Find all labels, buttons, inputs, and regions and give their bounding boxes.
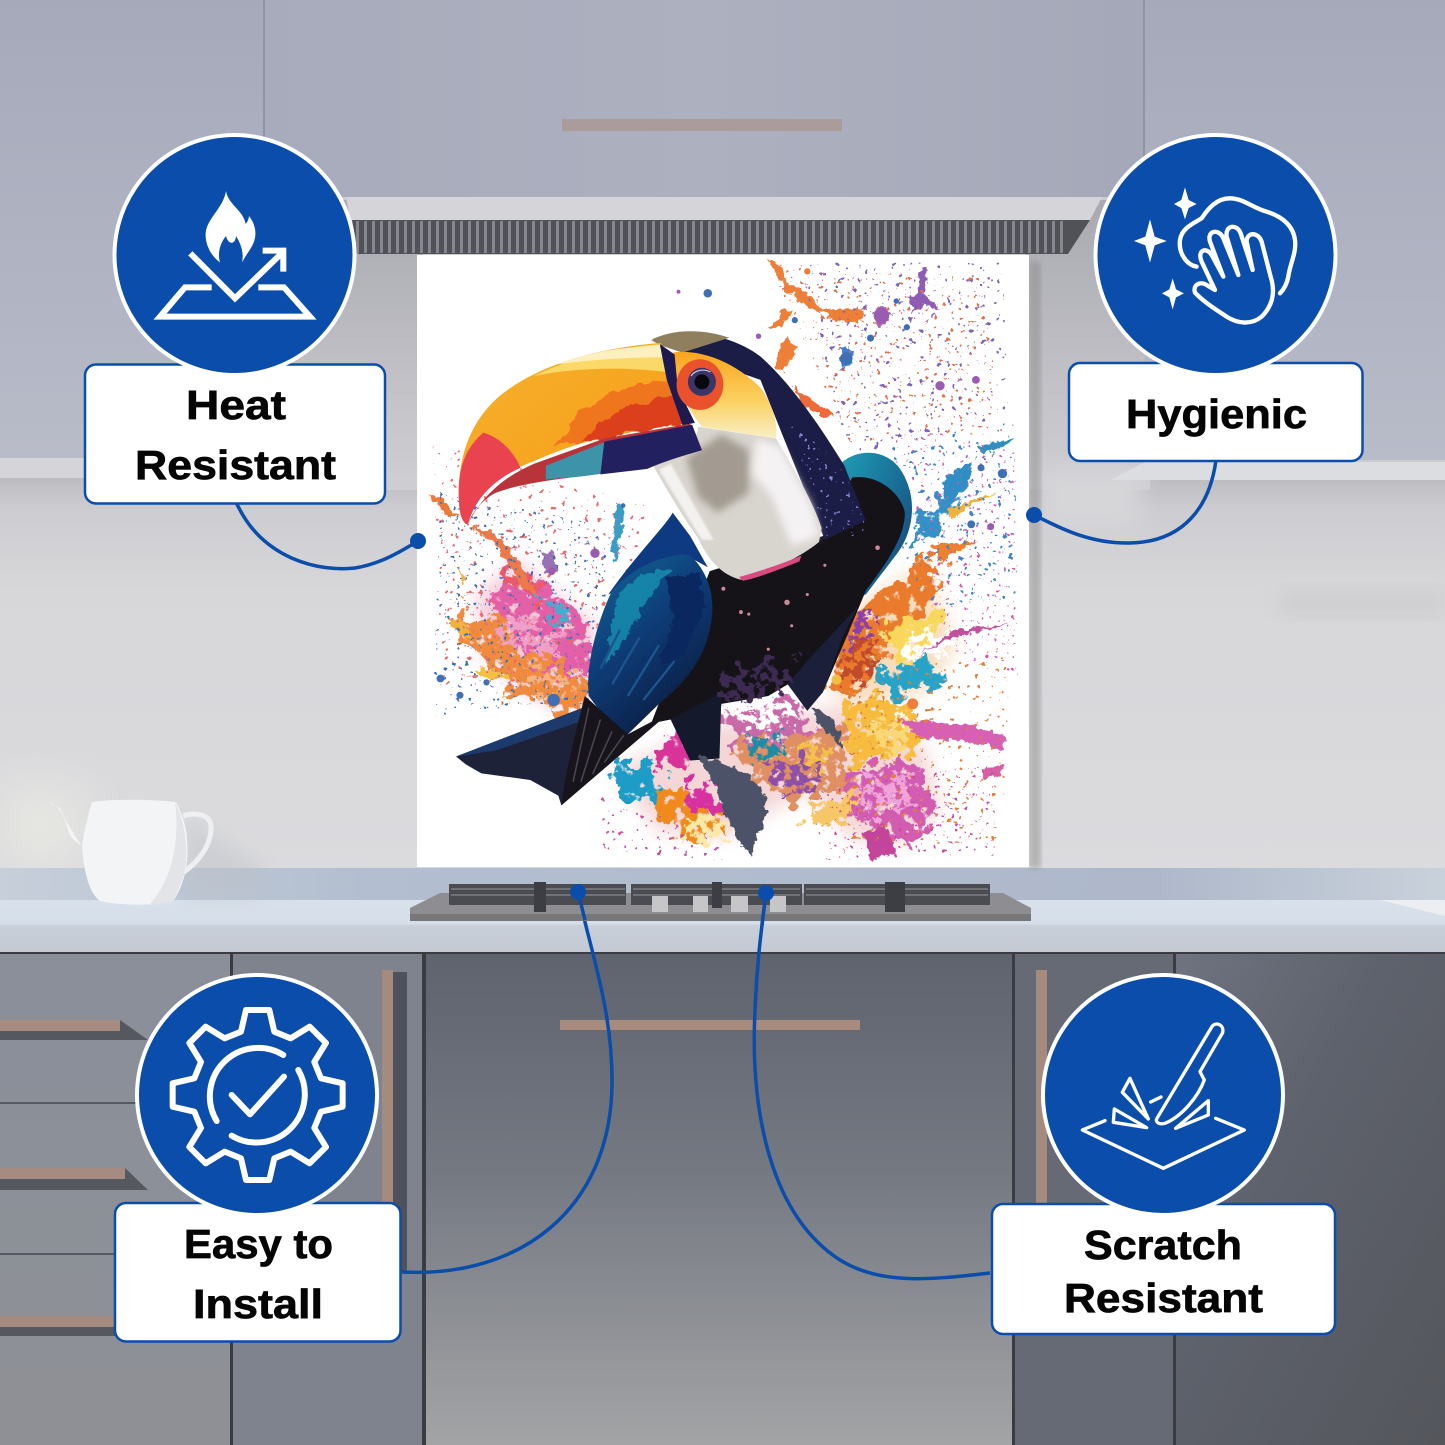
gas hob — [410, 882, 1031, 925]
feet — [698, 708, 841, 858]
callout: Heat Resistant: Resistant — [135, 442, 336, 488]
icon: knife scratching surface — [1082, 1024, 1244, 1168]
white throat — [653, 427, 822, 581]
upper left cabinet — [0, 0, 263, 458]
connector line — [402, 884, 612, 1272]
callout: Scratch Resistant: Resistant — [1064, 1275, 1263, 1321]
icon circle — [112, 133, 356, 377]
icon circle — [135, 973, 379, 1217]
black body — [651, 477, 905, 760]
yellow face — [673, 352, 776, 438]
cooker hood — [346, 197, 1102, 254]
label box — [85, 364, 385, 504]
paint splash: main masses — [456, 474, 971, 844]
label text: Heat — [186, 382, 286, 428]
paint splash: soft colour base — [476, 559, 956, 844]
paint splash: droplets — [437, 289, 1007, 706]
connector line — [236, 502, 426, 569]
white jug — [48, 800, 265, 905]
label text: Hygienic — [1126, 391, 1307, 437]
upper centre cabinet — [265, 0, 1143, 197]
wall — [0, 470, 1445, 870]
callout: Scratch Resistant — [754, 885, 1335, 1334]
lower flank — [788, 606, 858, 711]
icon: wiping hand with sparkles — [1134, 187, 1295, 323]
paint splash: secondary mottling — [483, 591, 952, 840]
lower cabinets — [0, 952, 1445, 1445]
icon: flame over surface — [160, 191, 310, 317]
neck and head back — [653, 333, 866, 540]
drawer and door handles — [0, 1020, 148, 1040]
back wing — [842, 453, 912, 598]
tail — [456, 708, 589, 805]
label box — [115, 1203, 400, 1342]
body speckles — [721, 545, 880, 651]
upper right cabinet — [1145, 0, 1445, 460]
olive cap — [651, 331, 729, 353]
cabinet handle — [562, 119, 842, 131]
neck speckles — [788, 419, 870, 536]
wing — [561, 513, 712, 805]
callout: Easy to Install — [115, 884, 612, 1342]
paint splash: streaks — [427, 258, 1014, 860]
panel: toucan splashback — [417, 255, 1041, 868]
connector line — [754, 885, 990, 1279]
label text: Easy to — [184, 1221, 333, 1267]
label box — [1069, 363, 1362, 461]
callout: Heat Resistant — [85, 133, 426, 569]
callout: Easy to Install: Install — [193, 1281, 323, 1327]
beak — [459, 343, 702, 524]
counter top — [0, 868, 1445, 901]
label box — [992, 1204, 1335, 1334]
label text: Scratch — [1084, 1222, 1242, 1268]
toucan artwork — [427, 258, 1018, 864]
icon circle — [1094, 133, 1338, 377]
icon: gear with check mark — [173, 1010, 343, 1180]
belly mottling — [725, 661, 792, 704]
callout: Hygienic — [1026, 133, 1362, 543]
icon circle — [1041, 973, 1285, 1217]
leg — [671, 692, 721, 760]
eye — [677, 359, 723, 410]
connector line — [1026, 460, 1216, 543]
paint splash: fine specks — [433, 263, 1018, 864]
